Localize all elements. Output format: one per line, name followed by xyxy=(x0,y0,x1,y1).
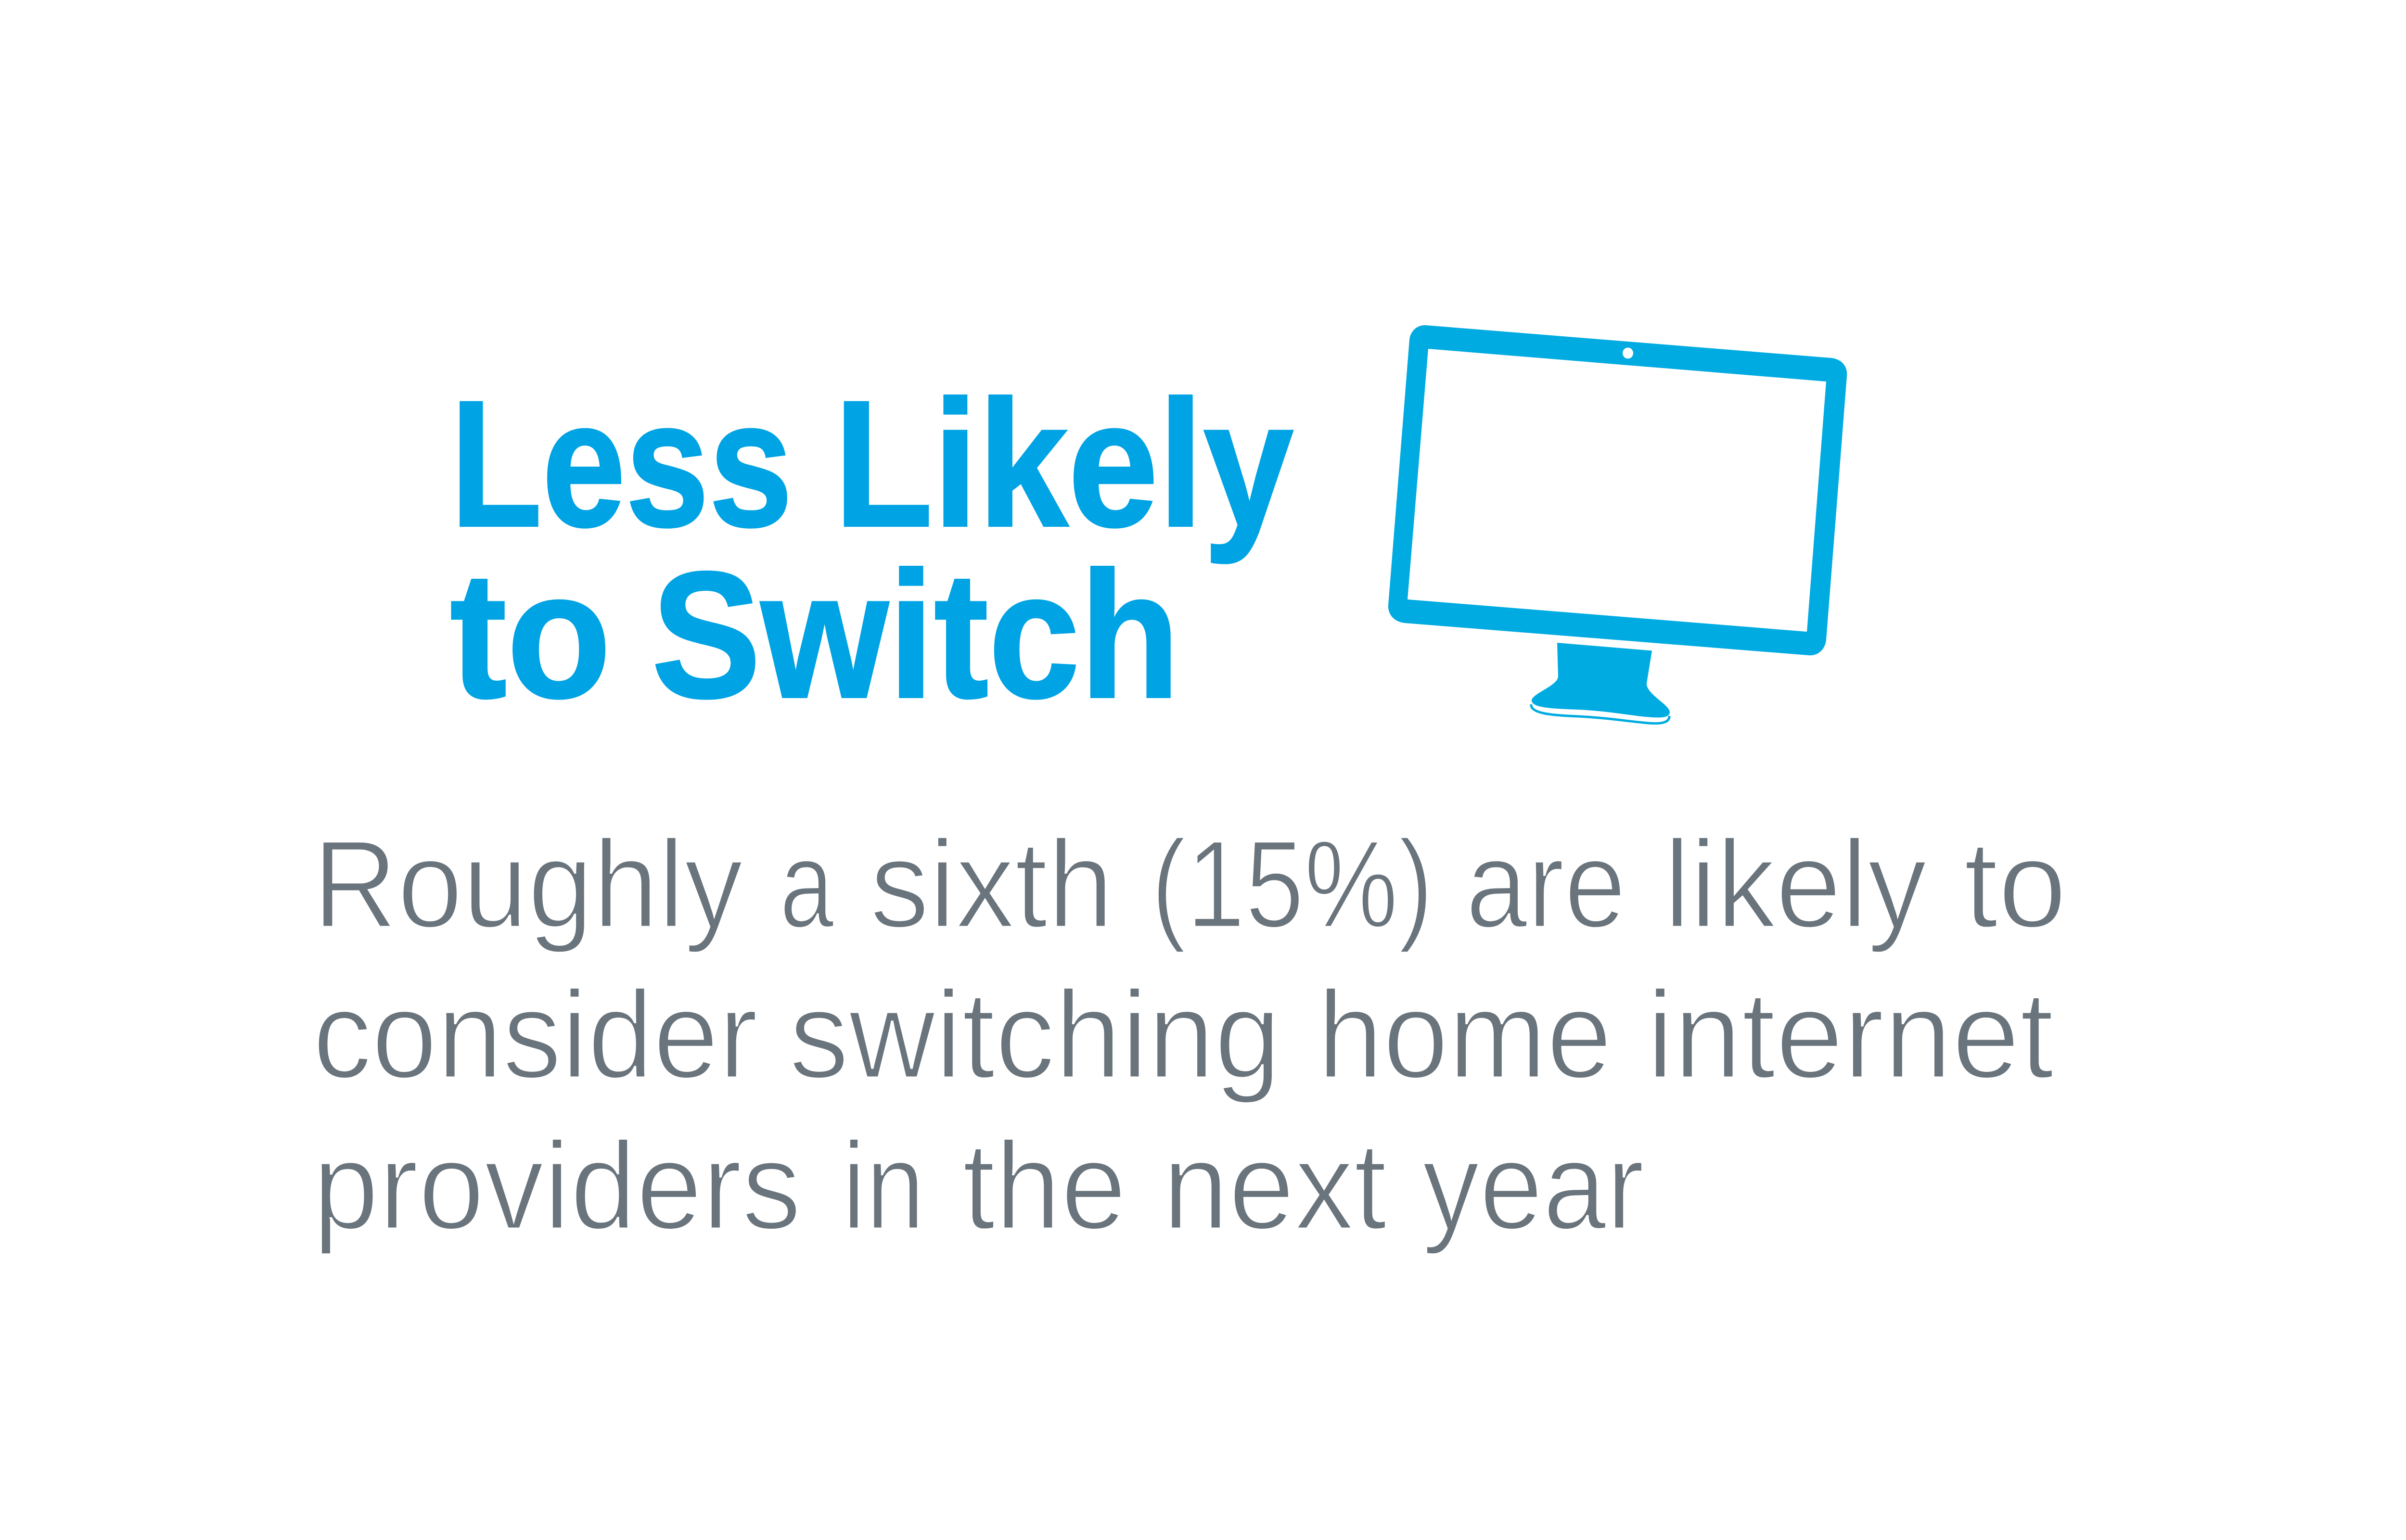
body text: home xyxy=(1318,965,1612,1104)
stand base shadow line xyxy=(1531,704,1669,724)
body text: next xyxy=(1163,1116,1387,1255)
body text: (15%) xyxy=(1151,815,1433,955)
title: Less Likely to Switch xyxy=(450,363,1294,736)
body text: switching xyxy=(789,965,1281,1105)
title: Less Likely to Switch: Likely xyxy=(834,363,1294,565)
body text: sixth xyxy=(870,815,1113,954)
icon: desktop monitor xyxy=(1388,325,1847,724)
body text: the xyxy=(962,1116,1126,1255)
body text: internet xyxy=(1647,965,2054,1104)
body text: are xyxy=(1466,815,1626,954)
webcam dot xyxy=(1623,347,1633,359)
title: Less Likely to Switch: Less xyxy=(450,363,793,564)
body text: a xyxy=(780,815,834,954)
body text: year xyxy=(1422,1116,1644,1256)
body text xyxy=(313,815,2067,1256)
monitor frame xyxy=(1388,325,1847,655)
title: Less Likely to Switch: Switch xyxy=(652,535,1180,736)
body text: to xyxy=(1964,815,2067,954)
monitor stand xyxy=(1532,643,1670,717)
body text: in xyxy=(842,1116,925,1255)
title: Less Likely to Switch: to xyxy=(450,535,611,736)
body text: providers xyxy=(313,1116,801,1256)
body text: consider xyxy=(313,965,758,1104)
body text: likely xyxy=(1664,815,1927,955)
body text: Roughly xyxy=(313,815,743,955)
